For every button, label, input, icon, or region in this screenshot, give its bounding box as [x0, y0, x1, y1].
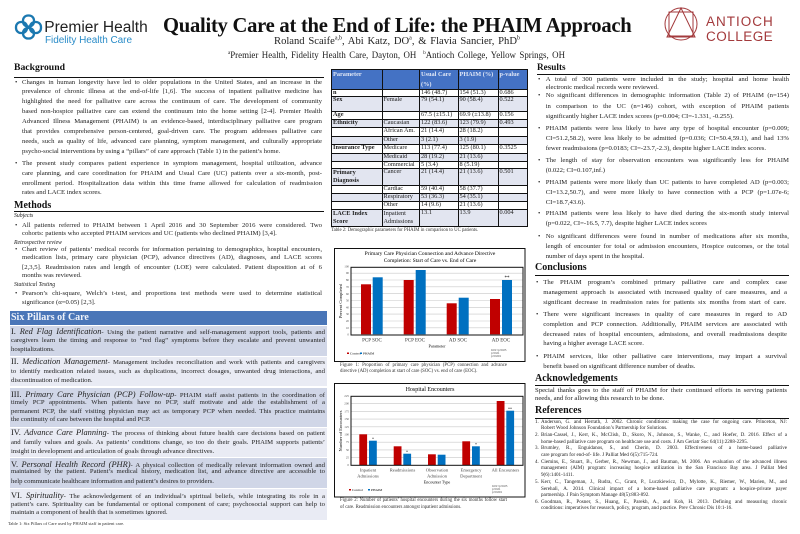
background text: •	[15, 79, 17, 86]
heading: conclusions: Conclusions	[535, 262, 587, 273]
table 2: demographic parameters: Ethnicity	[333, 119, 358, 126]
pillar III: timely PCP appointments. When patients have no PCP, staff motivate and aide the establishment of a	[11, 399, 325, 406]
chart: PCP connection and advance directive completion: 10	[346, 326, 349, 330]
pillar IV: and family values and goals. As patients’ conditions change, so too do their goals. PHAIM supports patients’	[11, 439, 325, 446]
methods text: •	[15, 246, 17, 253]
chart: hospital encounters: *	[475, 442, 477, 447]
table 2: demographic parameters: Caucasian	[384, 119, 409, 126]
pillar VI: maintain a component of health that is sometimes ignored.	[11, 509, 168, 516]
table 2: demographic parameters: Commercial	[384, 161, 415, 168]
table 2: demographic parameters: 3 (2.1)	[421, 136, 438, 143]
table 2: demographic parameters: 0.493	[500, 119, 514, 126]
background text	[15, 79, 322, 196]
background text: care planning, and care coordination for PHAIM and Usual Care (UC) patients over a six-month, post-	[22, 170, 322, 177]
conclusions text: PHAIM services, like other palliative care interventions, may impart a survival	[543, 353, 787, 360]
table 2: demographic parameters: 0.004	[500, 209, 514, 216]
chart: hospital encounters: Emergency	[461, 468, 482, 472]
reference list: partnership. J Pain Symptom Manage 48(5):883-892.	[541, 492, 650, 498]
reference list: care program for end-of- life. J Palliat Med 6(5):715-724.	[541, 452, 658, 458]
panel: six pillars of care	[8, 311, 327, 526]
table 2: demographic parameters: Inpatient Admissions	[384, 210, 413, 225]
chart: hospital encounters: *	[372, 436, 374, 442]
chart: hospital encounters: **	[508, 406, 512, 412]
reference list: Anderson, G. and Herrath, J. 2002. Chronic conditions: making the case for ongoing care. Princeton, NJ:	[541, 419, 787, 425]
conclusions text: significant decrease in readmission rates for patients six months from start of care.	[543, 299, 786, 306]
pillar VI: VI. Spirituality- The acknowledgement of an individual’s spiritual beliefs, while integrating its role in a	[11, 491, 325, 500]
table 2: demographic parameters: 53 (36.3)	[421, 193, 444, 200]
chart: hospital encounters: *	[406, 450, 408, 454]
chart: hospital encounters: 150	[344, 417, 349, 421]
chart: hospital encounters: Encounter Type	[424, 480, 450, 484]
figure 2 caption	[340, 497, 507, 510]
reference list: 5.	[535, 479, 539, 485]
results text: The length of stay for observation encounters was significantly less for PHAIM	[546, 157, 789, 164]
table 2: demographic parameters: Other	[384, 201, 398, 208]
results text: in comparison to the UC (n=146) cohort, with exception of PHAIM patients	[546, 103, 789, 110]
results text: •	[538, 92, 540, 99]
methods text	[14, 212, 322, 306]
chart: hospital encounters: 200	[344, 402, 349, 406]
conclusions text: •	[536, 311, 538, 318]
table 2: demographic parameters: 54 (35.1)	[460, 193, 483, 200]
logo: Premier Health Fidelity Health Care	[14, 14, 148, 46]
heading: methods: Methods	[14, 200, 51, 211]
conclusions text	[536, 279, 787, 370]
results text: CI=51.2,58.2), were less likely to be admitted (p=0.036; CI=50.4,59.1), and had 13%	[546, 135, 789, 142]
table 2: demographic parameters: 90 (58.4)	[460, 96, 483, 103]
chart: PCP connection and advance directive completion: 50	[346, 298, 349, 302]
chart: PCP connection and advance directive completion: Control	[350, 352, 361, 356]
background text: prevalence of chronic illness at the end-of-life [1,6]. The success of inpatient palliative medicine has	[22, 88, 322, 95]
results text: •	[538, 125, 540, 132]
chart: hospital encounters: Readmissions	[390, 468, 415, 472]
pillar III: permanent PCP, the staff visiting physician may act as temporary PCP when needed. This practice maintains	[11, 408, 325, 415]
methods text: medication lists, primary care physician (PCP), advance directives (AD), diagnoses, and LACE scores	[22, 254, 322, 261]
table 2: demographic parameters: 14 (9.6)	[421, 201, 441, 208]
conclusions text: The PHAIM program’s combined primary palliative care and complex case	[543, 279, 787, 286]
methods text: Statistical Testing	[14, 282, 55, 288]
authors: Roland Scaifea,b, Abi Katz, DOa, & Flavia Sancier, PhDb	[274, 35, 520, 47]
table 2: demographic parameters	[331, 69, 528, 227]
pillar III: the continuity of care between the hospital and PCP.	[11, 416, 150, 423]
chart: hospital encounters: PHAIM	[371, 488, 383, 492]
table 2: demographic parameters: Usual Care (%)	[421, 71, 451, 88]
table 2: demographic parameters: 13.1	[421, 209, 432, 216]
chart: hospital encounters: 0	[347, 463, 349, 467]
chart: PCP connection and advance directive completion: 0	[347, 332, 349, 336]
pillar VI: patient’s care. Spirituality can be fundamental or optional component of care; psychosocial support can help to	[11, 501, 325, 508]
conclusions text: management approach is associated with increased quality of care measures, and a	[543, 289, 787, 296]
table 2: demographic parameters: 13.9	[460, 209, 471, 216]
chart: PCP connection and advance directive completion: 90	[346, 271, 349, 275]
figure 2 caption: Figure 2: Number of patients’ hospital encounters during the six months follow start	[340, 498, 507, 503]
conclusions text: •	[536, 353, 538, 360]
background text: Changes in human longevity have led to older populations in the United States, and an increase in the	[22, 79, 322, 86]
chart: PCP connection and advance directive completion: 20	[346, 319, 349, 323]
chart: PCP connection and advance directive completion: p<0.001	[491, 354, 501, 358]
pillar I: caregivers learn the timing and response to “red flag” symptoms before they escalate and prevent unwanted	[11, 337, 325, 344]
pillar V: help communicate healthcare information and patient’s desires to providers.	[11, 478, 214, 485]
results text: PHAIM patients were less likely to have any type of hospital encounter (p=0.009;	[546, 125, 789, 132]
chart: hospital encounters: p<0.001	[492, 490, 502, 494]
pillars header: Six Pillars of Care	[11, 312, 89, 323]
results text: •	[538, 210, 540, 217]
table 2: demographic parameters: African Am.	[384, 127, 415, 134]
chart: hospital encounters: 125	[344, 425, 349, 429]
table 2: demographic parameters: 5 (3.4)	[421, 161, 438, 168]
section: references	[535, 405, 789, 511]
chart: PCP connection and advance directive completion: AD SOC	[449, 338, 468, 344]
chart: PCP connection and advance directive completion: Primary Care Physician Connection and Advance Directive	[365, 251, 496, 257]
table 2: demographic parameters: 0.3525	[500, 144, 517, 151]
heading: acknowledgements: Acknowledgements	[535, 373, 618, 384]
chart: PCP connection and advance directive completion: 70	[346, 285, 349, 289]
results text: number of days spent in the hospital.	[546, 253, 644, 260]
acknowledgements text	[535, 387, 787, 402]
chart: hospital encounters: 225	[344, 394, 349, 398]
results text: •	[538, 157, 540, 164]
table 2: demographic parameters: 3 (1.9)	[460, 136, 476, 143]
table 2: demographic parameters: 58 (37.7)	[460, 185, 483, 192]
table 2 caption: Table 2: Demographic parameters for PHAIM in comparison to UC patients.	[331, 228, 478, 233]
results text: •	[538, 76, 540, 83]
methods text: •	[15, 222, 17, 229]
figure 1 caption: Figure 1: Proportion of primary care physician (PCP) connection and advance	[340, 362, 507, 368]
reference list: 1.	[535, 419, 539, 425]
chart: hospital encounters: Number of Encounters	[338, 410, 343, 452]
results text: (p=0.022, CI=-16.5, 7.7), despite higher LACE index scores	[546, 220, 707, 227]
table 2: demographic parameters: 0.156	[500, 111, 514, 118]
results text: PHAIM patients were less likely to have died during the six-month study interval	[546, 210, 789, 217]
table 2: demographic parameters: 0.501	[500, 168, 514, 175]
chart: hospital encounters: Hospital Encounters	[406, 387, 455, 393]
table 2: demographic parameters: Parameter	[333, 71, 362, 78]
table 2: demographic parameters: 67.5 (±15.1)	[421, 111, 452, 118]
pillar I	[10, 326, 327, 356]
table 2: demographic parameters: 21 (13.6)	[460, 168, 483, 175]
table 2: demographic parameters: 154 (51.3)	[460, 89, 486, 96]
methods text: Chart review of patients’ medical records for information pertaining to demographics, hospital encounters,	[22, 246, 322, 253]
table 2: demographic parameters: n	[333, 89, 337, 96]
pillar V: V. Personal Health Record (PHR)- A physical collection of medically relevant information owned and	[11, 460, 325, 469]
logo: Antioch College	[664, 7, 773, 43]
pillar IV: insight in development and articulation of goals through advance directives.	[11, 448, 214, 455]
methods text: All patients referred to PHAIM between 1 April 2016 and 30 September 2016 were considered. Two	[22, 222, 322, 229]
pillar IV	[10, 428, 327, 457]
results text: (0.022; CI=0.107,inf.)	[546, 167, 605, 174]
figure 2 caption: of care. Readmission encounters amongst inpatient admissions.	[340, 505, 462, 510]
conclusions text: •	[536, 279, 538, 286]
table 2: demographic parameters: Age	[333, 111, 344, 118]
pillar V	[10, 458, 327, 488]
table 2: demographic parameters: Cancer	[384, 168, 401, 175]
pillar III	[10, 388, 327, 427]
chart: PCP connection and advance directive completion	[334, 248, 526, 362]
pillar I: I. Red Flag Identification- Using the patient narrative and self-management support tools, patients and	[11, 327, 325, 336]
table 2: demographic parameters: Sex	[333, 96, 342, 103]
chart: PCP connection and advance directive completion: Completion: Start of Care vs. End of Care	[384, 257, 477, 264]
methods text: Retrospective review	[14, 240, 62, 246]
results text: significantly higher LACE index scores (p=0.004; CI=-1.331, -0.255).	[546, 113, 734, 120]
table 2: demographic parameters: 69.9 (±13.8)	[460, 111, 491, 118]
chart: hospital encounters: 175	[344, 409, 349, 413]
chart: hospital encounters: Admission	[427, 474, 448, 478]
reference list: conditions: imperatives for research, policy, program, and practice. Prev Chronic Dis 10:1-16.	[541, 505, 732, 511]
results text: •	[538, 179, 540, 186]
conclusions text: There were significant increases in quality of care measures in regard to AD	[543, 311, 787, 318]
results text: No significant differences in demographic information (Table 2) of PHAIM (n=154)	[546, 92, 789, 99]
section: conclusions	[535, 262, 789, 370]
methods text: months was reviewed.	[22, 272, 82, 279]
methods text: •	[15, 290, 17, 297]
table 2: demographic parameters: 21 (14.4)	[421, 168, 444, 175]
chart: PCP connection and advance directive completion: 40	[346, 306, 349, 310]
heading: background: Background	[14, 62, 65, 73]
conclusions text: completion and PCP connection. Additionally, PHAIM services are associated with	[543, 321, 787, 328]
table 2: demographic parameters: 113 (77.4)	[421, 144, 447, 151]
chart: PCP connection and advance directive completion: 100	[344, 264, 349, 268]
chart: PCP connection and advance directive completion: 30	[346, 312, 349, 316]
reference list: home-based palliative care program on healthcare use and costs. J Am Geriatr Soc 64(11):2288-2295.	[541, 439, 748, 445]
heading: references: References	[535, 405, 581, 416]
table 2: demographic parameters: 28 (18.2)	[460, 127, 483, 134]
chart: PCP connection and advance directive completion: PHAIM	[363, 352, 375, 356]
chart: hospital encounters	[334, 383, 526, 498]
table 2: demographic parameters: Medicaid	[384, 153, 407, 160]
pillars header	[10, 311, 327, 325]
conclusions text: benefit based on significant difference number of deaths.	[543, 363, 695, 370]
chart: hospital encounters: Inpatient	[360, 468, 377, 472]
reference list: Kerr, C., Tangeman, J., Rudra, C., Grant, P., Luczkiewicz, D., Mylotte, K., Riemer, W., Marien, M., and	[541, 479, 787, 485]
reference list: Robert Wood Johnson Foundation’s Partnership for Solutions.	[541, 425, 667, 431]
chart: PCP connection and advance directive completion: 80	[346, 278, 349, 282]
background text: The present study compares patient experience in symptom management, hospital utilization, advance	[22, 160, 322, 167]
methods text: significance (α=0.05) [2,3].	[22, 299, 96, 306]
logo: Premier Health Fidelity Health Care: Premier Health	[44, 19, 148, 36]
reference list: Serehali, A. 2014. Clinical impact of a home-based palliative care program: a hospice-private payer	[541, 486, 787, 492]
results text: CI=18.7,43.6).	[546, 199, 585, 206]
table 2: demographic parameters: LACE Index Score	[333, 210, 367, 225]
table 2: demographic parameters: 0.522	[500, 96, 514, 103]
reference list	[535, 419, 787, 511]
background text: •	[15, 160, 17, 167]
chart: hospital encounters: Control	[352, 488, 363, 492]
pillar III: III. Primary Care Physician (PCP) Follow-up- PHAIM staff assist patients in the coordination of	[11, 390, 325, 399]
reference list: 2.	[535, 432, 539, 438]
figure 1 caption: directive (AD) completion at start of care (SOC) vs. end of care (EOC).	[340, 368, 477, 374]
reference list: Ciemins, E., Stuart, B., Gerber, R., Newman, J., and Bauman, M. 2006. An evaluation of the advanced illness	[541, 459, 787, 465]
background text: highlighted the need for palliative care across the continuum of care. The development of community	[22, 98, 322, 105]
background text: enrollment period. Hospitalization data within this time frame allowed for calculation of readmission	[22, 180, 322, 186]
table 2: demographic parameters: 79 (54.1)	[421, 96, 444, 103]
table 2: demographic parameters: Primary Diagnosis	[333, 169, 359, 184]
reference list: 3.	[535, 445, 539, 451]
chart: hospital encounters: 75	[346, 440, 349, 444]
section: background	[14, 62, 324, 196]
figure 1 caption	[340, 362, 507, 374]
chart: hospital encounters: Department	[460, 474, 483, 478]
table 2: demographic parameters: Medicare	[384, 144, 407, 151]
logo: Antioch College: ANTIOCH	[706, 14, 773, 29]
reference list: Brian-Cassel, J., Kerr, K., McClish, D., Skoro, N., Johnson, S., Wanke, C., and Hoefer, D. 2016. Effect of a	[541, 432, 787, 438]
chart: hospital encounters: 25	[346, 456, 349, 460]
table 2: demographic parameters: 8 (5.19)	[460, 161, 479, 168]
title: Quality Care at the End of Life: the PHAIM Approach	[163, 15, 632, 37]
reference list: 6.	[535, 499, 539, 505]
reference list: Brumley, R., Enguidanos, S., and Cherin, D. 2003. Effectiveness of a home-based palliative	[541, 445, 787, 451]
table 2: demographic parameters: Respiratory	[384, 193, 413, 200]
pillar I: hospitalizations.	[11, 346, 55, 353]
results text: No significant differences were found in number of medications after six months,	[546, 233, 789, 240]
heading: results: Results	[537, 62, 566, 72]
table 2: demographic parameters: 123 (79.9)	[460, 119, 486, 126]
pillar II: II. Medication Management- Management includes reconciliation and work with patients and caregivers	[11, 357, 325, 366]
conclusions text: having a higher average LACE score.	[543, 340, 644, 347]
table 2: demographic parameters: 21 (13.6)	[460, 153, 483, 160]
table 2: demographic parameters: 28 (19.2)	[421, 153, 444, 160]
table 2: demographic parameters: 21 (14.4)	[421, 127, 444, 134]
table 2: demographic parameters: 0.686	[500, 89, 514, 96]
background text: based non-hospice palliative care can extend the continuum into the home setting [2-4]. Premier Health	[22, 108, 322, 115]
chart: hospital encounters: All Encounters	[492, 468, 520, 472]
results text: fewer readmissions (p=0.0183; CI=-23.7,-2.3), despite higher LACE index scores.	[546, 145, 766, 152]
table 1 caption: Table 1: Six Pillars of Care used by PHAIM staff in patient care.	[8, 521, 124, 526]
table 2: demographic parameters: 125 (80.1)	[460, 144, 486, 151]
table 2: demographic parameters: Cardiac	[384, 185, 403, 192]
methods text: cohorts: patients who accepted PHAIM services and UC (patients who declined PHAIM) [3,4].	[22, 230, 277, 237]
affiliations: aPremier Health, Fidelity Health Care, Dayton, OH bAntioch College, Yellow Springs, OH	[228, 50, 565, 60]
background text: Advanced Illness Management (PHAIM) is an evidence-based, interdisciplinary palliative care program	[22, 118, 322, 125]
chart: PCP connection and advance directive completion: 0.01<p<0.05	[491, 348, 507, 352]
table 2: demographic parameters: Other	[384, 136, 398, 143]
chart: PCP connection and advance directive completion: p<0.01	[491, 351, 500, 355]
chart: PCP connection and advance directive completion: Percent Completed	[338, 283, 343, 318]
chart: PCP connection and advance directive completion: 60	[346, 292, 349, 296]
chart: PCP connection and advance directive completion: PCP SOC	[362, 338, 383, 344]
section: methods	[14, 200, 324, 306]
pillar VI	[10, 489, 327, 520]
conclusions text: decreased rates of hospital encounters, admissions, and overall readmissions despite	[543, 331, 787, 338]
reference list: Goodman, R., Posner, S., Huang, E., Parekh, A., and Koh, H. 2013. Defining and measuring chronic	[541, 499, 787, 505]
results text: CI=13.2,50.7), and were more likely to have connection with a PCP (p=1.07e-6;	[546, 189, 789, 196]
acknowledgements text: needs, and for allowing this research to be done.	[535, 395, 664, 402]
results text: A total of 300 patients were included in the study; hospital and home health	[546, 76, 789, 83]
results text: length of encounter for total or admission encounters, Hospice outcomes, or the total	[546, 243, 789, 250]
pillar V: maintained by the patient. Patient’s medical history, medication list, and advance directive are accessible to	[11, 468, 325, 475]
chart: hospital encounters: 50	[346, 448, 349, 452]
results text: PHAIM patients were more likely than UC patients to have completed AD (p=0.003;	[546, 179, 789, 186]
chart: PCP connection and advance directive completion: PCP EOC	[405, 338, 426, 344]
table 2: demographic parameters: Female	[384, 96, 402, 103]
background text: that provides comprehensive person-centered, goal-driven care. The program addresses palliative care	[22, 128, 322, 135]
section: results	[537, 62, 790, 260]
methods text: Pearson’s chi-square, Welch’s t-test, and proportions test methods were used to determine statistical	[22, 290, 322, 297]
pillar II: to identify medication related issues, such as duplications, incorrect dosages, unwanted drug interactions, and	[11, 368, 325, 375]
acknowledgements text: Special thanks goes to the staff of PHAIM for their continued efforts in serving patients	[535, 387, 787, 394]
table 2: demographic parameters: 146 (48.7)	[421, 89, 447, 96]
background text: needs, such as quality of life, advanced care planning, symptom management, and culturally appropriate	[22, 138, 322, 145]
chart: PCP connection and advance directive completion: AD EOC	[492, 338, 511, 344]
table 2: demographic parameters: Insurance Type	[333, 144, 375, 151]
results text: •	[538, 233, 540, 240]
chart: hospital encounters: 100	[344, 432, 349, 436]
table 2: demographic parameters: p-value	[500, 71, 519, 78]
section: acknowledgements	[535, 373, 789, 402]
table 2: demographic parameters: 21 (13.6)	[460, 201, 483, 208]
pillar II	[10, 357, 327, 386]
methods text: Subjects	[14, 213, 33, 219]
table 2: demographic parameters: PHAIM (%)	[460, 71, 493, 78]
reference list: 4.	[535, 459, 539, 465]
results text	[538, 76, 789, 260]
chart: hospital encounters: Observation	[426, 468, 449, 472]
reference list: management (AIM) program: increasing hospice utilization in the San Francisco Bay area. J Palliat Med	[541, 465, 787, 471]
reference list: 9(6):1401-1411.	[541, 472, 574, 478]
table 2: demographic parameters: 122 (83.6)	[421, 119, 447, 126]
table 2: demographic parameters: 59 (40.4)	[421, 185, 444, 192]
background text: rates and LACE index scores.	[22, 189, 102, 196]
pillar II: discontinuation of medication.	[11, 377, 93, 384]
chart: hospital encounters: Admissions	[357, 474, 379, 478]
chart: hospital encounters: 0.01<p<0.05	[492, 484, 508, 488]
chart: PCP connection and advance directive completion: **	[504, 276, 510, 281]
background text: psycho-social interventions by using a “pillars” of care approach (Table 1) in the patient’s home.	[22, 148, 280, 155]
methods text: [2,3,5]. Readmission rates and length of encounter (LOE) were calculated. Patient disposition at of 6	[22, 264, 322, 271]
pillar IV: IV. Advance Care Planning- The process of thinking about future health care decisions based on patient	[11, 428, 325, 437]
chart: hospital encounters: p<0.01	[492, 487, 501, 491]
logo: Premier Health Fidelity Health Care: Fidelity Health Care	[45, 35, 132, 46]
chart: PCP connection and advance directive completion: Parameter	[429, 344, 446, 348]
results text: electronic medical records were reviewed.	[546, 84, 659, 91]
